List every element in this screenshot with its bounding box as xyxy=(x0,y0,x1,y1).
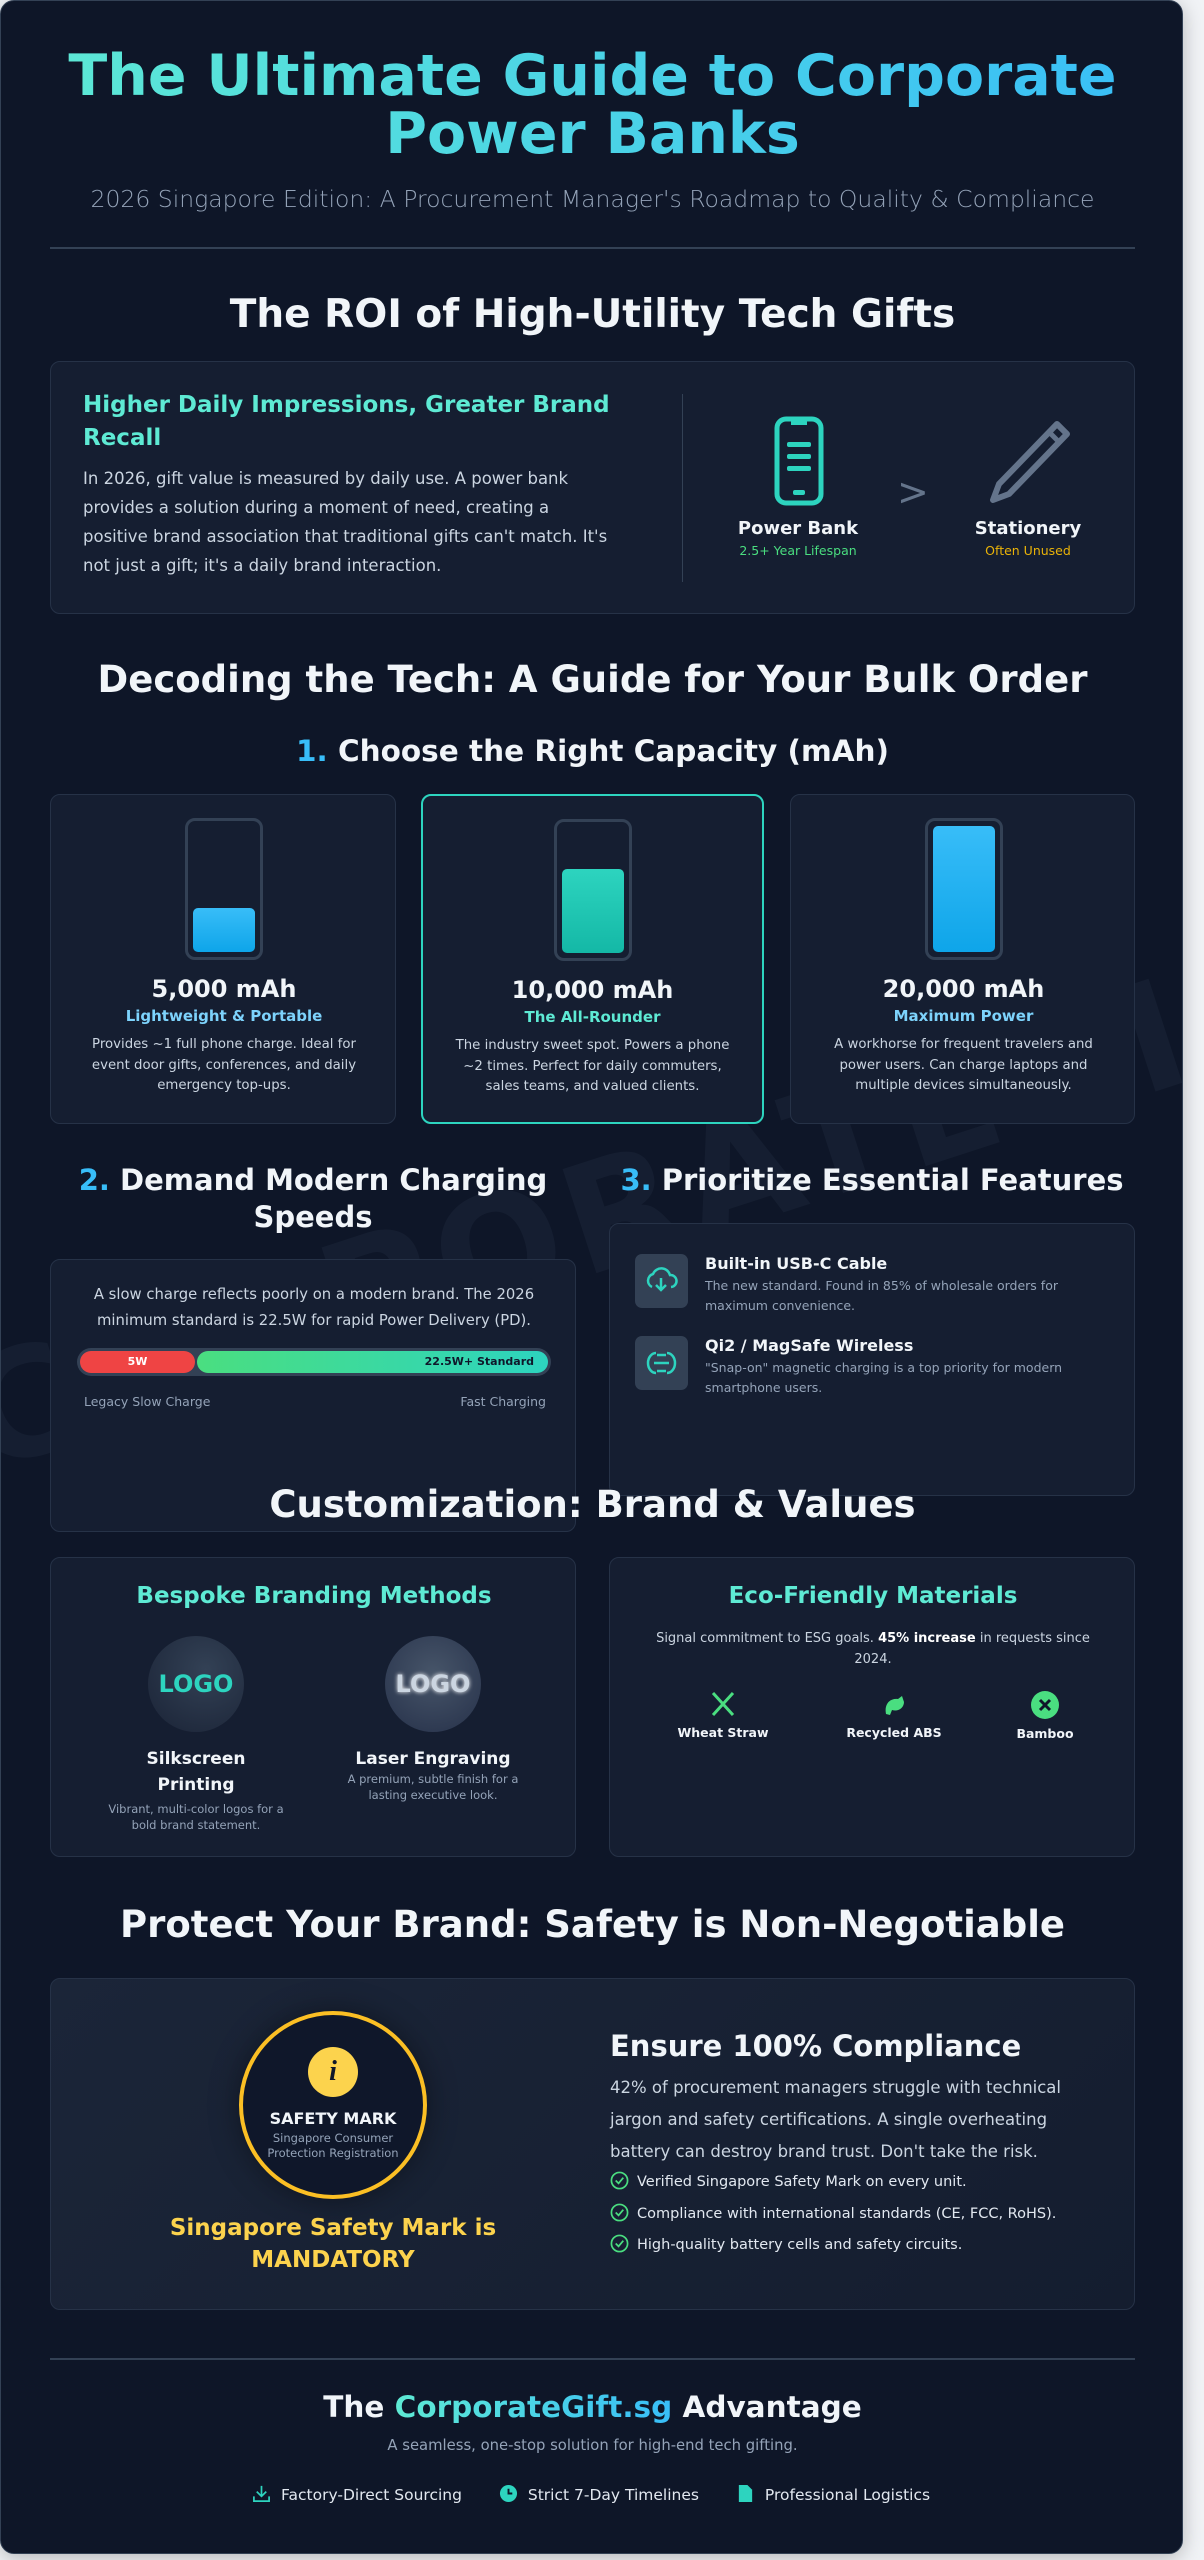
method: laser: Laser Engraving xyxy=(355,1749,511,1769)
method: silkscreen: Silkscreen xyxy=(147,1749,245,1769)
charging text: A slow charge reflects poorly on a modern brand. The 2026 minimum standard is 22.5W for rapid Power Delivery (PD). xyxy=(94,1286,534,1329)
icon: logo color xyxy=(148,1636,244,1732)
method: silkscreen: Printing xyxy=(158,1775,234,1795)
icon: info xyxy=(308,2047,358,2097)
callout: mandatory xyxy=(170,2215,496,2273)
feature: usb-c xyxy=(635,1254,1058,1313)
panel: branding xyxy=(50,1557,576,1857)
badge: safety mark: Singapore Consumer xyxy=(273,2131,393,2145)
icon: battery full xyxy=(925,818,1003,960)
bar labels: Fast Charging xyxy=(460,1394,546,1409)
subheading: charging speeds: 2. Demand Modern Charging xyxy=(79,1163,547,1197)
label: power bank xyxy=(738,518,858,558)
heading: ROI: The ROI of High-Utility Tech Gifts xyxy=(230,292,955,337)
checklist: Compliance with international standards (CE, FCC, RoHS). xyxy=(637,2206,1056,2222)
panel: ROI xyxy=(50,361,1135,614)
footer heading: The CorporateGift.sg Advantage xyxy=(323,2390,862,2424)
capacity text xyxy=(92,975,356,1093)
method: silkscreen xyxy=(108,1636,284,1832)
subtitle: 2026 Singapore Edition: A Procurement Manager's Roadmap to Quality & Compliance xyxy=(90,185,1094,213)
ROI body: positive brand association that traditional gifts can't match. It's not just a gift; it's a daily brand interaction. xyxy=(83,527,607,575)
feature: usb-c: Built-in USB-C Cable xyxy=(705,1254,887,1273)
badge: safety mark xyxy=(239,2011,427,2199)
icon: logo engraved xyxy=(385,1636,481,1732)
bar labels: Legacy Slow Charge xyxy=(84,1394,210,1409)
branding heading: Bespoke Branding Methods xyxy=(136,1583,492,1609)
panel: 5000 xyxy=(50,794,396,1124)
feature: wireless xyxy=(635,1336,1062,1395)
eco text: Signal commitment to ESG goals. 45% increase in requests since 2024. xyxy=(656,1631,1090,1667)
material: wheat straw xyxy=(677,1692,769,1740)
subheading: features: 3. Prioritize Essential Features xyxy=(620,1163,1124,1197)
capacity text: Maximum Power xyxy=(894,1007,1033,1025)
capacity text: The industry sweet spot. Powers a phone ~2 times. Perfect for daily commuters, sales teams, and valued clients. xyxy=(456,1038,729,1094)
eco heading: Eco-Friendly Materials xyxy=(729,1583,1017,1609)
icon: magsafe xyxy=(635,1336,688,1390)
capacity text: A workhorse for frequent travelers and power users. Can charge laptops and multiple devices simultaneously. xyxy=(834,1037,1093,1093)
label: stationery xyxy=(975,518,1081,558)
icon: pencil xyxy=(990,421,1070,503)
capacity text: 10,000 mAh xyxy=(512,976,673,1004)
checklist: Verified Singapore Safety Mark on every unit. xyxy=(637,2174,967,2190)
bar labels xyxy=(84,1394,546,1409)
subheading: charging speeds: Speeds xyxy=(253,1200,372,1234)
checklist: High-quality battery cells and safety circuits. xyxy=(637,2237,962,2253)
bar chart: charging speed xyxy=(77,1348,551,1376)
compliance body: 42% of procurement managers struggle with technical jargon and safety certifications. A single overheating battery can destroy brand trust. Don't take the risk. xyxy=(610,2078,1061,2161)
icon: info: i xyxy=(329,2056,337,2087)
feature: usb-c: The new standard. Found in 85% of wholesale orders for maximum convenience. xyxy=(705,1278,1058,1313)
title: The Ultimate Guide to Corporate xyxy=(68,43,1117,109)
heading: safety: Protect Your Brand: Safety is Non-Negotiable xyxy=(120,1903,1065,1946)
icon: logo engraved: LOGO xyxy=(396,1670,470,1698)
footer features: Factory-Direct Sourcing Strict 7-Day Timelines Professional Logistics xyxy=(281,2486,930,2504)
panel: eco xyxy=(609,1557,1135,1857)
label: power bank: 2.5+ Year Lifespan xyxy=(739,543,857,558)
title xyxy=(1,47,1184,163)
material: recycled abs: Recycled ABS xyxy=(846,1725,942,1740)
capacity text: Lightweight & Portable xyxy=(126,1007,322,1025)
capacity text: Provides ~1 full phone charge. Ideal for event door gifts, conferences, and daily emergency top-ups. xyxy=(92,1037,356,1093)
capacity text: 20,000 mAh xyxy=(883,975,1044,1003)
icon: battery mid xyxy=(554,819,632,961)
footer subtitle: A seamless, one-stop solution for high-end tech gifting. xyxy=(387,2437,798,2454)
feature: wireless: "Snap-on" magnetic charging is a top priority for modern smartphone users. xyxy=(705,1360,1062,1395)
method: silkscreen: Vibrant, multi-color logos for a bold brand statement. xyxy=(108,1802,284,1832)
capacity text: The All-Rounder xyxy=(525,1008,660,1026)
icon: cloud download xyxy=(635,1254,688,1308)
ROI body: In 2026, gift value is measured by daily use. A power bank provides a solution during a moment of need, creating a xyxy=(83,469,568,517)
bar chart: charging speed: 5W xyxy=(128,1355,147,1368)
checklist xyxy=(610,2172,1056,2253)
subheading: capacity: 1. Choose the Right Capacity (mAh) xyxy=(296,734,889,768)
capacity text xyxy=(834,975,1093,1093)
panel: charging xyxy=(50,1259,576,1532)
ROI heading: Higher Daily Impressions, Greater Brand Recall xyxy=(83,392,610,451)
heading: customization: Customization: Brand & Values xyxy=(269,1483,916,1526)
arrow: greater than: > xyxy=(897,470,929,514)
ROI body xyxy=(83,469,607,575)
icon: logo color: LOGO xyxy=(159,1670,233,1698)
panel: 20000 xyxy=(790,794,1135,1124)
capacity text: 5,000 mAh xyxy=(152,975,296,1003)
panel: features xyxy=(609,1223,1135,1496)
badge: safety mark: SAFETY MARK xyxy=(270,2109,396,2128)
material: wheat straw: Wheat Straw xyxy=(677,1725,769,1740)
material: recycled abs xyxy=(846,1696,942,1740)
icon: power bank xyxy=(774,416,824,506)
heading: decoding: Decoding the Tech: A Guide for Your Bulk Order xyxy=(98,658,1087,701)
material: bamboo: Bamboo xyxy=(1016,1726,1074,1741)
method: laser: A premium, subtle finish for a lasting executive look. xyxy=(348,1772,518,1802)
material: bamboo xyxy=(1016,1691,1074,1741)
badge: safety mark: Protection Registration xyxy=(267,2146,399,2160)
bar chart: charging speed: 22.5W+ Standard xyxy=(425,1355,534,1368)
label: power bank: Power Bank xyxy=(738,518,858,539)
icon: battery low xyxy=(185,818,263,960)
method: laser xyxy=(348,1636,518,1802)
capacity text xyxy=(456,976,729,1094)
panel: 10000 xyxy=(421,794,764,1124)
callout: mandatory: Singapore Safety Mark is xyxy=(170,2215,496,2241)
subheading: charging speeds xyxy=(79,1163,547,1234)
callout: mandatory: MANDATORY xyxy=(251,2247,415,2273)
label: stationery: Stationery xyxy=(975,518,1081,539)
feature: wireless: Qi2 / MagSafe Wireless xyxy=(705,1336,913,1355)
compliance heading: Ensure 100% Compliance xyxy=(610,2029,1021,2063)
title: Power Banks xyxy=(385,101,800,167)
label: stationery: Often Unused xyxy=(985,543,1071,558)
panel: safety xyxy=(50,1978,1135,2310)
